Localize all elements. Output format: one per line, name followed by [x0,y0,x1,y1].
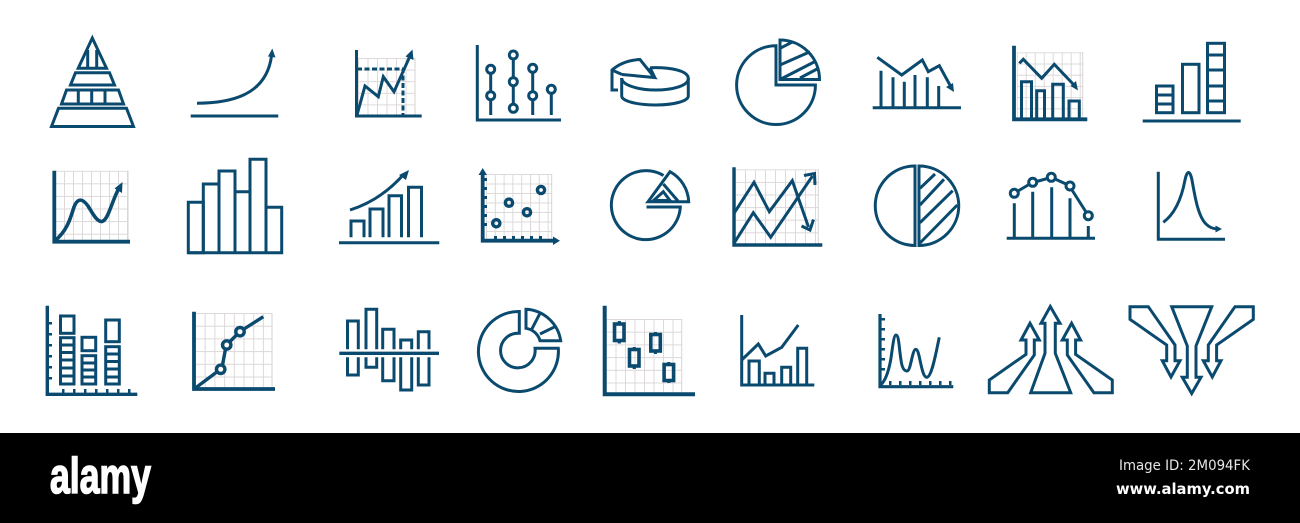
icon: three converging arrows [1130,307,1253,394]
icon: spiked line chart [880,314,953,387]
icon: histogram [188,159,282,253]
image ID: Image ID: 2M094FK [1119,458,1250,474]
footer band [0,433,1300,523]
icon: falling bar line chart [873,57,961,108]
icon: connected points on grid [194,312,275,389]
logo: alamy: alamy [50,448,151,504]
icon: line chart with dashed markers [356,50,422,116]
icon: bars with rising line [742,315,814,385]
icon: dot stem plot [477,45,561,120]
icon: bar and line chart falling on grid [1014,46,1087,119]
website: www.alamy.com [1116,480,1250,498]
icon: 3D pie chart [612,60,688,105]
icon: half-hatched pie [875,166,959,246]
icon: candlestick chart on grid [605,306,695,394]
icon: scatter plot [478,168,560,245]
icon: two crossing lines on grid [734,167,822,245]
icon: growing bars with arrow [339,170,439,243]
icon: pyramid [52,38,134,126]
icon: exponential growth curve [191,48,278,116]
icon: stacked bars [1143,43,1241,121]
icon: pie chart with triangular slice [611,171,689,240]
icon: stacked bars with axis ticks [47,306,137,394]
icon: peak curve [1158,172,1225,239]
icon: positive and negative bars [339,309,439,390]
icon: stem chart with connected dots [1007,173,1095,238]
icon: pie chart with hatched slice [737,40,820,124]
icon: donut chart [478,309,561,391]
icon: wave line on grid [54,171,130,242]
icon: three diverging arrows [989,306,1112,393]
